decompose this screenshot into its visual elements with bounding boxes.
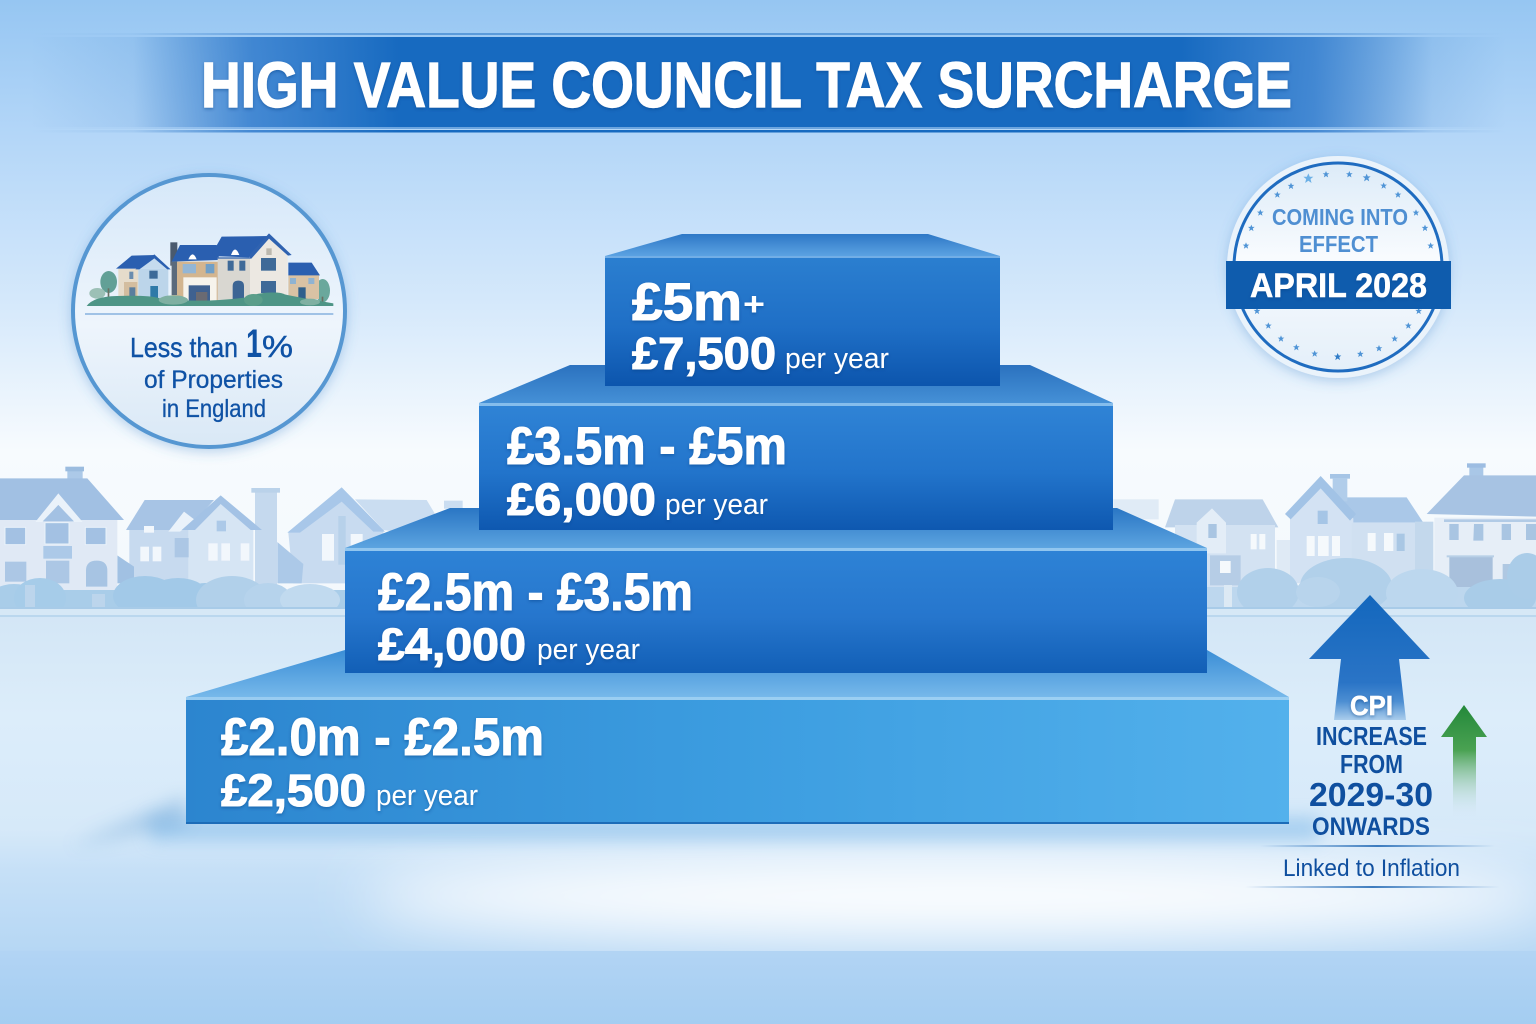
CPI text: ONWARDS <box>1312 813 1430 841</box>
tier: 3.5m to 5m <box>479 365 1113 530</box>
title banner <box>30 33 1506 132</box>
badge text: coming into effect <box>1272 204 1408 257</box>
tier: 3.5m to 5m: £3.5m - £5m <box>507 417 787 476</box>
callout text: of Properties <box>144 366 283 394</box>
badge text: coming into effect: EFFECT <box>1299 231 1378 257</box>
CPI text <box>1309 721 1433 841</box>
tier: 2.0m to 2.5m <box>186 650 1289 824</box>
tier: 2.5m to 3.5m: £2.5m - £3.5m <box>378 563 693 622</box>
tier: 2.5m to 3.5m <box>345 508 1207 673</box>
tier: 2.0m to 2.5m: £2,500 <box>221 765 366 816</box>
callout text: % <box>262 329 293 364</box>
tier: 5m plus: per year <box>785 343 889 375</box>
tier: 2.0m to 2.5m: per year <box>376 780 478 812</box>
ribbon: april 2028: APRIL 2028 <box>1250 267 1427 305</box>
tier: 2.5m to 3.5m: per year <box>537 634 640 666</box>
arrow: green inflation <box>1441 705 1487 818</box>
CPI text: FROM <box>1340 749 1403 779</box>
background road <box>0 607 1536 617</box>
callout text: in England <box>162 395 266 423</box>
background hedges: left <box>0 576 345 607</box>
title: HIGH VALUE COUNCIL TAX SURCHARGE <box>201 49 1292 121</box>
tier: 2.0m to 2.5m: £2.0m - £2.5m <box>221 708 544 767</box>
tier: 5m plus: £7,500 <box>632 328 776 379</box>
linked to inflation note: Linked to Inflation <box>1283 855 1460 882</box>
ribbon: april 2028 <box>1226 261 1451 309</box>
background hedges: right <box>1207 553 1536 607</box>
icon: row of houses <box>85 233 333 315</box>
background houses: left <box>0 467 463 590</box>
callout text: Less than <box>130 332 238 363</box>
background houses: right <box>1113 463 1536 589</box>
callout text <box>130 322 293 423</box>
tier: 5m plus: + <box>743 286 765 322</box>
arrow: CPI increase: CPI <box>1350 690 1393 721</box>
callout text: 1 <box>246 322 262 366</box>
badge text: coming into effect: COMING INTO <box>1272 204 1408 230</box>
tier: 2.5m to 3.5m: £4,000 <box>378 619 526 670</box>
callout: less than 1% of properties <box>73 175 345 447</box>
tier: 3.5m to 5m: per year <box>665 489 768 521</box>
tier: 5m plus <box>605 234 1000 386</box>
arrow: CPI increase <box>1309 595 1430 721</box>
shadow under pyramid <box>70 796 1320 846</box>
CPI text: 2029-30 <box>1309 776 1433 813</box>
tier: 3.5m to 5m: £6,000 <box>507 474 656 525</box>
CPI text: INCREASE <box>1316 721 1427 751</box>
badge: coming into effect <box>1226 156 1451 378</box>
badge stars <box>1243 171 1434 360</box>
tier: 5m plus: £5m <box>632 273 742 332</box>
